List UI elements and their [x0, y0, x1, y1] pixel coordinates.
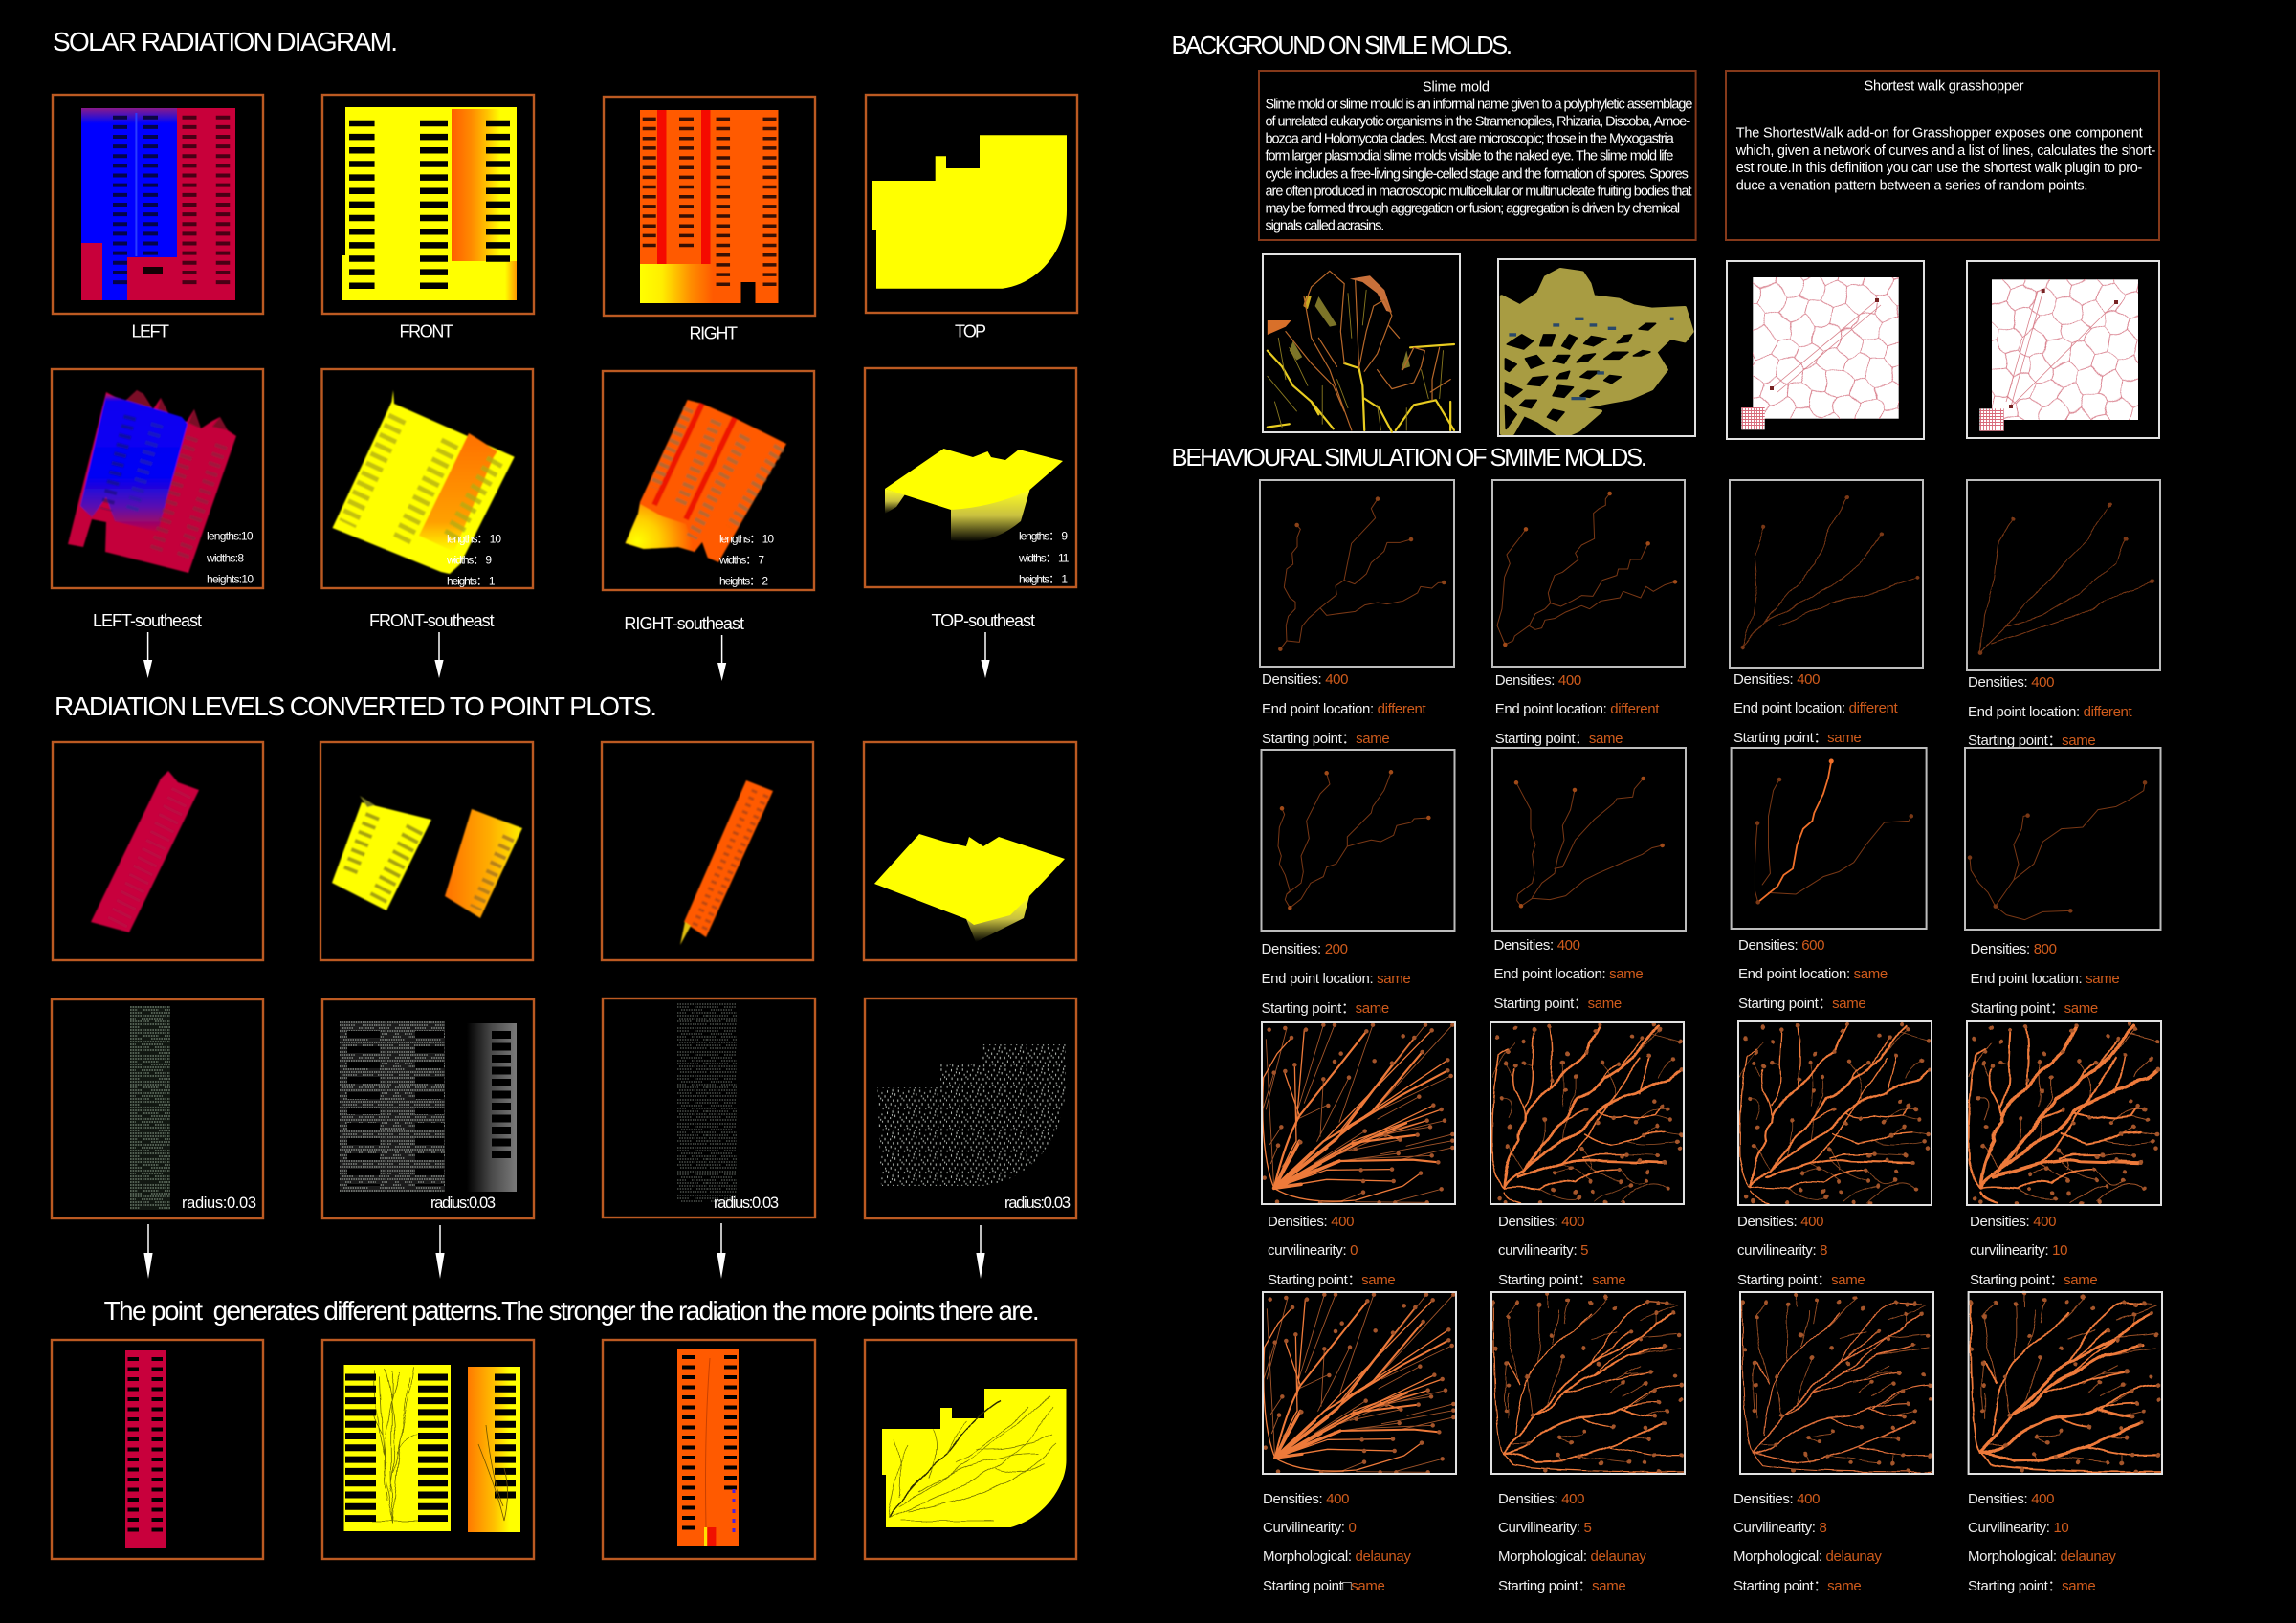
- panel: simulation row 2 column 2: [1492, 748, 1686, 931]
- panel: simulation row 1 column 3: [1730, 480, 1923, 668]
- panel: simulation row 2 column 3: [1732, 748, 1927, 929]
- labels: curvilinearity 8: curvilinearity: 8: [1737, 1242, 1827, 1259]
- panel: front strips radiation: [320, 742, 533, 960]
- labels: simulation row 1 column 4: Densities: 400: [1968, 674, 2054, 691]
- panel: simulation row 1 column 4: [1967, 480, 2160, 670]
- labels: delaunay curvilinearity 5: Curvilinearity: 5: [1498, 1520, 1591, 1536]
- body: The ShortestWalk add-on for Grasshopper exposes one component: [1736, 126, 2143, 142]
- dimensions: lengths： 9: [1019, 530, 1068, 543]
- labels: simulation row 1 column 2: [1495, 672, 1660, 747]
- image: slime mold blob: [1498, 259, 1695, 436]
- windows: [106, 416, 222, 557]
- body: cycle includes a free-living single-celled stage and the formation of spores. Spores: [1265, 166, 1689, 182]
- label: radius: radius:0.03: [714, 1195, 779, 1212]
- arrow: top: [981, 632, 990, 678]
- labels: simulation row 1 column 1: [1262, 671, 1427, 747]
- labels: simulation row 2 column 2: End point location: same: [1494, 966, 1643, 982]
- labels: simulation row 2 column 1: Densities: 200: [1261, 941, 1348, 957]
- labels: simulation row 2 column 3: Starting point：same: [1738, 996, 1866, 1012]
- label: radius: radius:0.03: [1004, 1195, 1071, 1212]
- labels: simulation row 1 column 4: Starting point：same: [1968, 733, 2095, 749]
- labels: curvilinearity 10: Starting point：same: [1970, 1272, 2097, 1288]
- arrow: front: [434, 632, 444, 678]
- dimensions: lengths： 10: [447, 532, 501, 545]
- panel: top point plot: [865, 998, 1076, 1218]
- labels: delaunay curvilinearity 5: [1498, 1491, 1646, 1594]
- labels: simulation row 2 column 4: [1971, 941, 2119, 1017]
- labels: simulation row 2 column 2: Starting point：same: [1494, 996, 1622, 1012]
- labels: delaunay curvilinearity 0: [1263, 1491, 1411, 1594]
- labels: simulation row 2 column 1: [1261, 941, 1410, 1017]
- labels: simulation row 2 column 2: [1494, 937, 1643, 1012]
- panel: top view: [866, 95, 1077, 313]
- labels: simulation row 2 column 4: Densities: 800: [1971, 941, 2057, 957]
- labels: curvilinearity 8: Densities: 400: [1737, 1214, 1823, 1230]
- body: of unrelated eukaryotic organisms in the Stramenopiles, Rhizaria, Discoba, Amoe-: [1265, 115, 1690, 130]
- panel: simulation row 2 column 1: [1261, 750, 1454, 931]
- dimensions: widths： 7: [718, 553, 764, 566]
- panel: front pattern result: [322, 1340, 534, 1559]
- windows: [121, 116, 223, 285]
- label: left: LEFT: [132, 321, 169, 340]
- label: front: FRONT: [400, 321, 453, 340]
- dimensions: heights： 1: [447, 574, 496, 587]
- labels: curvilinearity 5: Densities: 400: [1498, 1214, 1584, 1230]
- labels: delaunay curvilinearity 0: Starting point□same: [1263, 1578, 1384, 1594]
- windows: [650, 118, 769, 286]
- body: are often produced in macroscopic multicellular or multinucleate fruiting bodies that: [1265, 184, 1691, 199]
- label: left southeast: LEFT-southeast: [93, 611, 202, 630]
- panel: delaunay curvilinearity 5 network: [1491, 1292, 1685, 1474]
- panel: simulation row 1 column 1: [1260, 480, 1454, 667]
- windows: [654, 408, 780, 537]
- labels: simulation row 1 column 3: [1733, 671, 1899, 746]
- labels: delaunay curvilinearity 10: Starting point：same: [1968, 1578, 2095, 1594]
- labels: curvilinearity 5: Starting point：same: [1498, 1272, 1625, 1288]
- labels: delaunay curvilinearity 10: Densities: 400: [1968, 1491, 2054, 1507]
- dimensions: [206, 530, 254, 585]
- dimensions: heights： 2: [719, 574, 768, 587]
- panel: left southeast isometric: [52, 369, 263, 588]
- labels: simulation row 1 column 1: Starting point：same: [1262, 731, 1389, 747]
- dimensions: lengths:10: [207, 530, 254, 543]
- panel: top southeast isometric: [865, 368, 1076, 587]
- labels: curvilinearity 10: curvilinearity: 10: [1970, 1242, 2067, 1259]
- title: Slime mold: [1423, 80, 1490, 96]
- labels: delaunay curvilinearity 5: Starting point：same: [1498, 1578, 1625, 1594]
- labels: simulation row 1 column 3: Densities: 400: [1733, 671, 1820, 688]
- labels: simulation row 2 column 1: End point location: same: [1261, 971, 1410, 987]
- label: radius: radius:0.03: [430, 1195, 496, 1212]
- panel: curvilinearity 0 network: [1262, 1022, 1455, 1204]
- labels: simulation row 2 column 2: Densities: 400: [1494, 937, 1580, 954]
- body: est route.In this definition you can use the shortest walk plugin to pro-: [1736, 161, 2143, 176]
- dimensions: heights： 1: [1019, 572, 1068, 585]
- labels: simulation row 1 column 4: End point location: different: [1968, 704, 2133, 720]
- labels: delaunay curvilinearity 5: Morphological: delaunay: [1498, 1548, 1646, 1565]
- panel: left strip radiation: [53, 742, 263, 960]
- veins: [354, 1368, 430, 1524]
- labels: delaunay curvilinearity 8: [1733, 1491, 1882, 1594]
- panel: left point plot: [52, 999, 263, 1218]
- heading: background on slime molds: BACKGROUND ON SIMLE MOLDS.: [1171, 33, 1512, 59]
- labels: simulation row 1 column 3: End point location: different: [1733, 700, 1899, 716]
- dimensions: [1018, 530, 1070, 585]
- labels: simulation row 2 column 1: Starting point：same: [1261, 1000, 1389, 1017]
- heading: radiation levels: RADIATION LEVELS CONVERTED TO POINT PLOTS.: [55, 691, 657, 721]
- labels: simulation row 1 column 2: Starting point：same: [1495, 731, 1623, 747]
- panel: simulation row 2 column 4: [1965, 748, 2160, 930]
- labels: curvilinearity 5: curvilinearity: 5: [1498, 1242, 1588, 1259]
- panel: slime mold text: [1259, 71, 1696, 240]
- labels: delaunay curvilinearity 8: Morphological: delaunay: [1733, 1548, 1882, 1565]
- image: slime mold veins: [1263, 254, 1460, 432]
- labels: delaunay curvilinearity 0: Morphological: delaunay: [1263, 1548, 1411, 1565]
- labels: delaunay curvilinearity 10: Curvilinearity: 10: [1968, 1520, 2068, 1536]
- panel: curvilinearity 8 network: [1738, 1021, 1932, 1205]
- dimensions: widths： 11: [1018, 551, 1070, 564]
- label: right southeast: RIGHT-southeast: [624, 614, 744, 633]
- body: duce a venation pattern between a series of random points.: [1736, 178, 2087, 193]
- panel: front point plot: [322, 999, 534, 1218]
- labels: curvilinearity 8: [1737, 1214, 1865, 1288]
- arrow: left: [144, 632, 152, 678]
- labels: simulation row 2 column 3: End point location: same: [1738, 966, 1888, 982]
- dimensions: widths： 9: [446, 553, 492, 566]
- labels: delaunay curvilinearity 10: Morphological: delaunay: [1968, 1548, 2116, 1565]
- arrow: right pattern: [717, 1223, 726, 1279]
- label: top: TOP: [955, 321, 986, 340]
- dimensions: heights:10: [207, 572, 254, 585]
- body: [1735, 126, 2156, 193]
- windows: [347, 417, 496, 545]
- dimensions: [718, 532, 774, 587]
- labels: delaunay curvilinearity 5: Densities: 400: [1498, 1491, 1584, 1507]
- arrow: right: [718, 635, 726, 681]
- labels: curvilinearity 10: Densities: 400: [1970, 1214, 2056, 1230]
- panel: top surface radiation: [864, 742, 1076, 960]
- panel: top pattern result: [865, 1340, 1076, 1559]
- panel: right point plot: [603, 998, 815, 1217]
- body: which, given a network of curves and a list of lines, calculates the short-: [1735, 143, 2156, 159]
- labels: delaunay curvilinearity 0: Curvilinearity: 0: [1263, 1520, 1356, 1536]
- panel: front southeast isometric: [321, 369, 533, 588]
- label: front southeast: FRONT-southeast: [369, 611, 495, 630]
- labels: delaunay curvilinearity 0: Densities: 400: [1263, 1491, 1349, 1507]
- labels: curvilinearity 0: Starting point：same: [1268, 1272, 1395, 1288]
- label: right: RIGHT: [689, 323, 738, 342]
- labels: simulation row 1 column 1: End point location: different: [1262, 701, 1427, 717]
- labels: curvilinearity 5: [1498, 1214, 1625, 1288]
- labels: simulation row 1 column 1: Densities: 400: [1262, 671, 1348, 688]
- dimensions: [446, 532, 501, 587]
- heading: solar radiation diagram: SOLAR RADIATION DIAGRAM.: [53, 27, 398, 56]
- labels: curvilinearity 0: [1268, 1214, 1395, 1288]
- labels: curvilinearity 0: Densities: 400: [1268, 1214, 1354, 1230]
- heading: behavioural simulation: BEHAVIOURAL SIMULATION OF SMIME MOLDS.: [1171, 445, 1647, 472]
- body: [1265, 98, 1693, 233]
- labels: simulation row 1 column 4: [1968, 674, 2133, 749]
- dimensions: lengths： 10: [719, 532, 774, 545]
- panel: right southeast isometric: [603, 371, 814, 590]
- labels: curvilinearity 10: [1970, 1214, 2097, 1288]
- body: signals called acrasins.: [1265, 218, 1384, 233]
- panel: delaunay curvilinearity 10 network: [1969, 1292, 2162, 1474]
- blue low-radiation area: [81, 108, 177, 300]
- panel: delaunay curvilinearity 8 network: [1740, 1292, 1933, 1474]
- dimensions: widths:8: [206, 551, 244, 564]
- title: Shortest walk grasshopper: [1864, 78, 2024, 94]
- body: may be formed through aggregation or fusion; aggregation is driven by chemical: [1265, 201, 1680, 216]
- labels: curvilinearity 8: Starting point：same: [1737, 1272, 1865, 1288]
- panel: simulation row 1 column 2: [1492, 480, 1685, 667]
- panel: right elevation: [604, 97, 815, 316]
- labels: delaunay curvilinearity 8: Starting point：same: [1733, 1578, 1861, 1594]
- label: radius: radius:0.03: [182, 1195, 256, 1212]
- panel: shortest walk text: [1726, 71, 2159, 240]
- labels: simulation row 2 column 4: Starting point：same: [1971, 1000, 2098, 1017]
- panel: curvilinearity 5 network: [1490, 1022, 1684, 1204]
- arrow: front pattern: [435, 1225, 445, 1279]
- labels: simulation row 2 column 3: [1738, 937, 1888, 1012]
- labels: simulation row 1 column 2: Densities: 400: [1495, 672, 1581, 689]
- labels: delaunay curvilinearity 8: Curvilinearity: 8: [1733, 1520, 1826, 1536]
- body: bozoa and Holomycota clades. Most are microscopic; those in the Myxogastria: [1265, 132, 1675, 147]
- panel: front elevation: [322, 95, 534, 314]
- arrow: left pattern: [144, 1224, 153, 1279]
- panel: right pattern result: [603, 1340, 815, 1559]
- labels: curvilinearity 0: curvilinearity: 0: [1268, 1242, 1358, 1259]
- panel: left elevation: [53, 95, 263, 314]
- arrow: top pattern: [976, 1225, 985, 1279]
- panel: right strip radiation: [602, 742, 813, 960]
- labels: simulation row 2 column 3: Densities: 600: [1738, 937, 1824, 954]
- labels: simulation row 1 column 3: Starting point：same: [1733, 730, 1861, 746]
- labels: simulation row 2 column 4: End point location: same: [1971, 971, 2119, 987]
- labels: simulation row 1 column 2: End point location: different: [1495, 701, 1660, 717]
- label: top southeast: TOP-southeast: [932, 611, 1035, 630]
- body: form larger plasmodial slime molds visible to the naked eye. The slime mold life: [1265, 149, 1674, 164]
- panel: curvilinearity 10 network: [1967, 1021, 2161, 1205]
- panel: delaunay curvilinearity 0 network: [1263, 1292, 1456, 1474]
- panel: left pattern result: [52, 1340, 263, 1559]
- image: shortest walk two points: [1727, 258, 1924, 440]
- veins: [888, 1396, 1057, 1521]
- labels: delaunay curvilinearity 8: Densities: 400: [1733, 1491, 1820, 1507]
- labels: delaunay curvilinearity 10: [1968, 1491, 2116, 1594]
- windows: [362, 121, 497, 289]
- body: Slime mold or slime mould is an informal name given to a polyphyletic assemblage: [1265, 98, 1693, 113]
- image: shortest walk three points: [1967, 260, 2161, 442]
- caption: point patterns: The point generates different patterns.The stronger the radiation the more points there are.: [104, 1296, 1040, 1326]
